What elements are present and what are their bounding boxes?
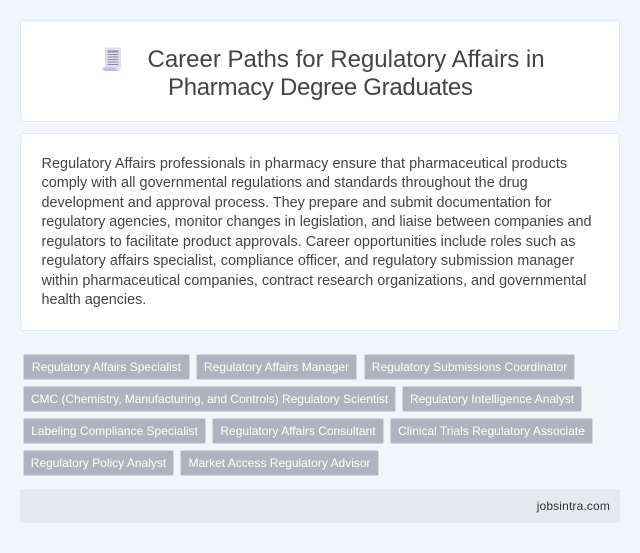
description panel xyxy=(20,133,620,331)
tag: Regulatory Affairs Consultant xyxy=(220,424,376,438)
icon: regulatory document scroll xyxy=(102,47,121,71)
description text: Regulatory Affairs professionals in pharmacy ensure that pharmaceutical products xyxy=(42,156,567,172)
tag: Clinical Trials Regulatory Associate xyxy=(398,424,585,438)
footer source text: jobsintra.com xyxy=(537,499,610,513)
description text: regulators to facilitate product approvals. Career opportunities include roles such as xyxy=(42,234,576,250)
tag: Regulatory Affairs Manager xyxy=(204,360,349,374)
tag: CMC (Chemistry, Manufacturing, and Controls) Regulatory Scientist xyxy=(31,392,388,406)
description text xyxy=(42,156,591,308)
description text: within pharmaceutical companies, contract research organizations, and governmental xyxy=(42,272,586,288)
tag xyxy=(180,450,379,476)
title panel xyxy=(20,20,620,122)
tag xyxy=(390,418,593,444)
description text: health agencies. xyxy=(42,292,146,308)
tag: Regulatory Affairs Specialist xyxy=(32,360,181,374)
description text: regulatory affairs specialist, compliance officer, and regulatory submission manager xyxy=(42,253,574,269)
footer bar xyxy=(20,489,620,523)
career path tags xyxy=(23,354,593,476)
tag xyxy=(364,354,575,380)
tag: Regulatory Intelligence Analyst xyxy=(410,392,574,406)
tag xyxy=(196,354,357,380)
tag xyxy=(23,354,190,380)
tag xyxy=(23,418,206,444)
tag xyxy=(23,386,396,412)
description text: development and approval process. They prepare and submit documentation for xyxy=(42,194,552,210)
tag xyxy=(23,450,174,476)
description text: comply with all governmental regulations and standards throughout the drug xyxy=(42,175,528,191)
tag: Regulatory Policy Analyst xyxy=(31,456,166,470)
tag: Regulatory Submissions Coordinator xyxy=(372,360,567,374)
description text: regulatory agencies, monitor changes in legislation, and liaise between companies and xyxy=(42,214,591,230)
title: Pharmacy Degree Graduates xyxy=(168,74,473,101)
tag: Labeling Compliance Specialist xyxy=(31,424,198,438)
title: Career Paths for Regulatory Affairs in xyxy=(148,46,545,73)
tag xyxy=(212,418,384,444)
tag: Market Access Regulatory Advisor xyxy=(188,456,371,470)
tag xyxy=(402,386,582,412)
title xyxy=(148,46,545,101)
